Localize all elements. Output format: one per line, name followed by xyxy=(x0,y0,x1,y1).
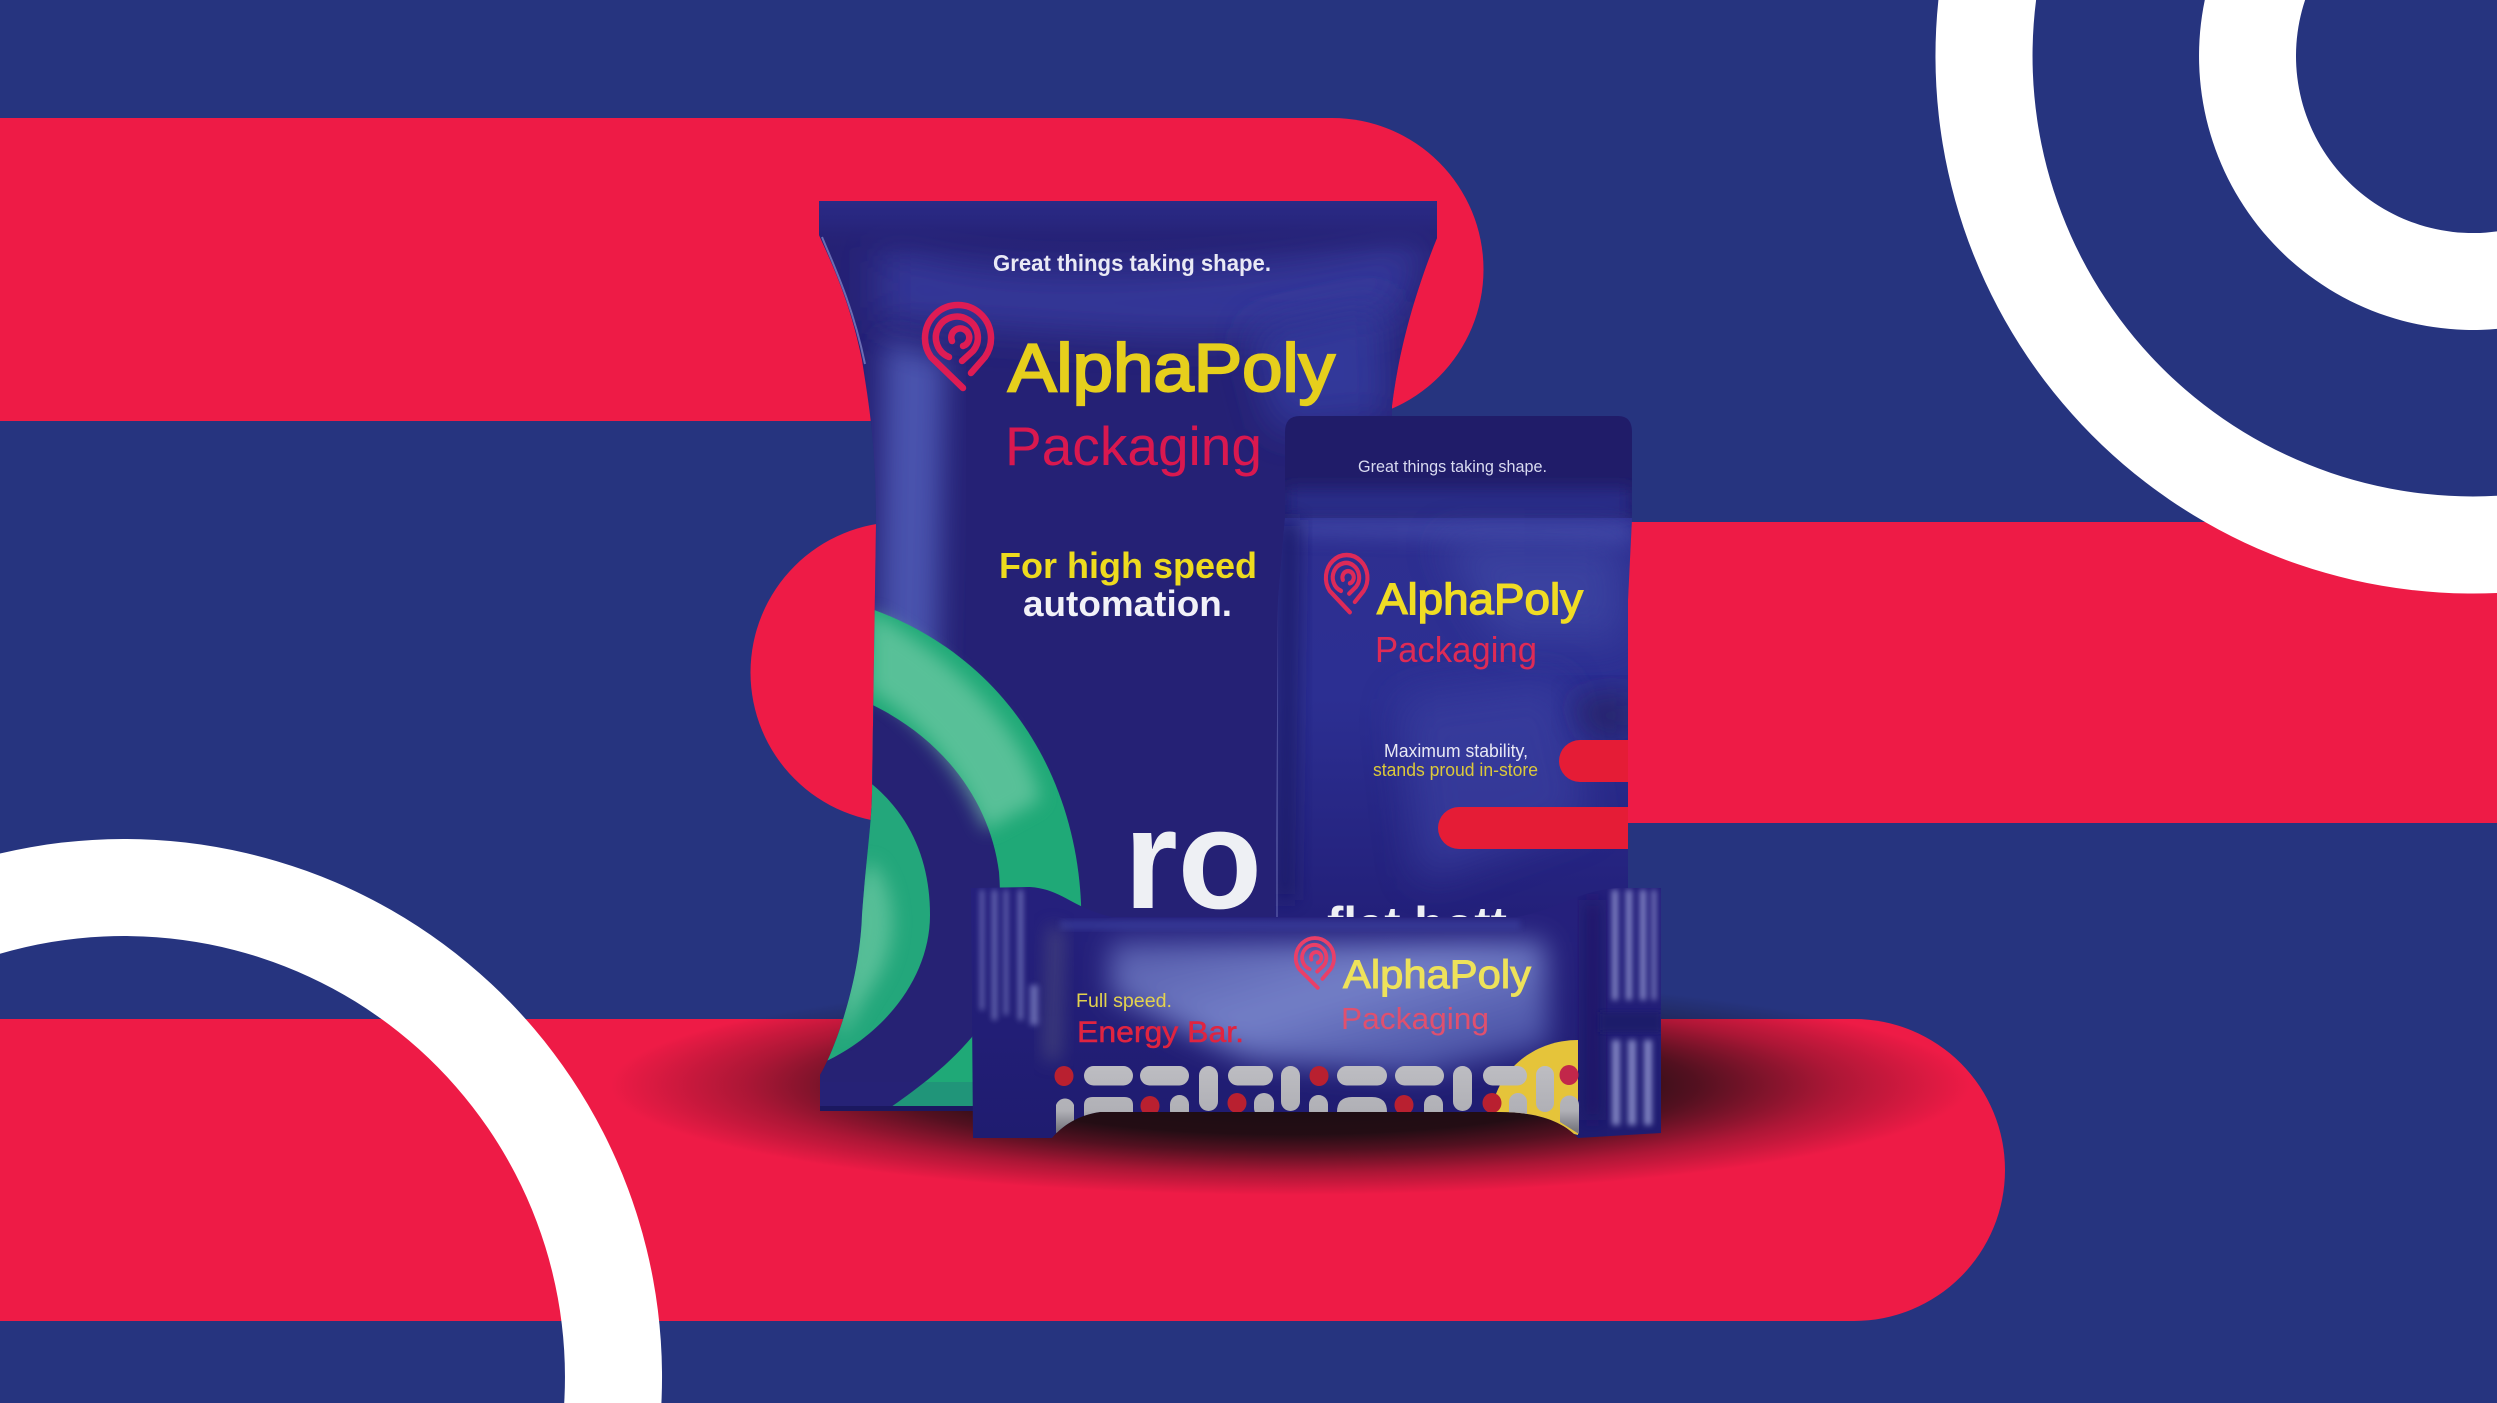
bag headline: For high speed xyxy=(999,545,1257,586)
bag packaging label: Packaging xyxy=(1005,415,1262,477)
pouch red pill upper xyxy=(1559,740,1630,782)
bar brand name: AlphaPoly xyxy=(1343,953,1531,997)
bar left crimp xyxy=(980,890,1038,1025)
icon: bag logo pin xyxy=(925,305,991,388)
bar packaging label: Packaging xyxy=(1341,1001,1489,1036)
pouch brand name: AlphaPoly xyxy=(1377,575,1583,624)
yellow quarter circle xyxy=(1492,1040,1578,1135)
pouch clipped headline: flat bott xyxy=(1327,897,1507,955)
icon: bar logo pin xyxy=(1296,938,1334,988)
bag tagline: Great things taking shape. xyxy=(993,250,1271,276)
bag brand name: AlphaPoly xyxy=(1008,330,1335,406)
pouch tagline: Great things taking shape. xyxy=(1358,457,1547,476)
bag edge highlight xyxy=(822,237,865,364)
green blob xyxy=(827,784,930,1061)
white ring: top right outer xyxy=(1935,0,2497,594)
bag body xyxy=(800,190,1440,1120)
bar right crimp xyxy=(1612,890,1656,1125)
pouch line one: Maximum stability, xyxy=(1384,741,1528,761)
red band: bottom xyxy=(0,1019,2005,1321)
red pattern dots xyxy=(1054,1065,1578,1116)
red band: middle xyxy=(750,522,2497,823)
bag top seal xyxy=(819,201,1437,249)
bar product name: Energy Bar. xyxy=(1077,1016,1244,1049)
energy bar xyxy=(960,880,1670,1145)
bar wrapper xyxy=(960,880,1670,1145)
red band: top xyxy=(0,118,1484,421)
bag large letters: ro xyxy=(1124,780,1262,939)
pouch xyxy=(1276,416,1632,917)
bag subheadline: automation. xyxy=(1023,583,1232,624)
white ring: bottom left xyxy=(0,839,662,1403)
green ring xyxy=(860,605,1081,1120)
pouch body xyxy=(1276,416,1632,917)
icon: pouch logo pin xyxy=(1326,555,1367,612)
white ring: top right inner xyxy=(2199,0,2497,330)
gray pattern pills xyxy=(1056,1066,1579,1134)
pouch line two: stands proud in-store xyxy=(1373,760,1538,780)
large bag xyxy=(800,190,1440,1120)
bag bottom seal xyxy=(893,1082,973,1106)
bar tagline: Full speed. xyxy=(1076,991,1172,1012)
ground shadow xyxy=(610,975,1970,1195)
pouch red pill lower xyxy=(1438,807,1630,849)
pouch packaging label: Packaging xyxy=(1375,629,1537,670)
